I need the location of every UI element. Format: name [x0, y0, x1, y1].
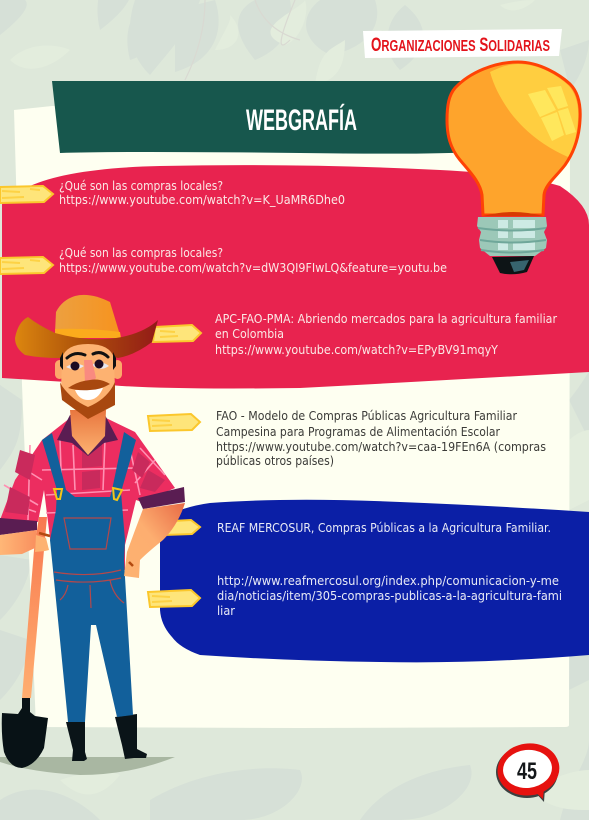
link text 6: liar [217, 604, 235, 618]
beard [60, 382, 115, 419]
cream content panel [14, 105, 570, 728]
link text 1: https://www.youtube.com/watch?v=K_UaMR6Dhe0 [59, 193, 345, 207]
overalls stitching [54, 518, 124, 608]
eyes [66, 362, 109, 369]
page number badge [494, 739, 563, 802]
section label: Organizaciones Solidarias: ORGANIZACIONES SOLIDARIAS [371, 35, 550, 56]
arrow tag 5 [165, 520, 200, 535]
collar [57, 415, 118, 456]
link text 3: https://www.youtube.com/watch?v=EPyBV91mqyY [215, 343, 499, 357]
section label: Organizaciones Solidarias [363, 29, 562, 58]
link text 4: Campesina para Programas de Alimentación Escolar [216, 425, 500, 439]
eyebrows [67, 353, 108, 358]
green title banner [52, 81, 475, 154]
link text 1 [59, 179, 345, 207]
arrow tag 4 [148, 414, 200, 431]
link text 3 [215, 312, 557, 357]
arrow tag 1 [0, 186, 53, 203]
shovel [2, 517, 48, 768]
link text 3: en Colombia [215, 327, 284, 341]
farmer illustration [0, 295, 185, 775]
link text 6: http://www.reafmercosul.org/index.php/comunicacion-y-me [217, 574, 559, 588]
link text 2: https://www.youtube.com/watch?v=dW3QI9FIwLQ&feature=youtu.be [59, 261, 447, 275]
buckles [54, 488, 122, 500]
moustache [68, 380, 110, 390]
link text 6 [217, 574, 562, 618]
head [55, 344, 122, 419]
hat [15, 295, 158, 358]
shirt [0, 415, 185, 570]
link text 4: FAO - Modelo de Compras Públicas Agricultura Familiar [216, 409, 517, 423]
panel: blue links [160, 500, 589, 662]
link text 4: https://www.youtube.com/watch?v=caa-19FEn6A (compras [216, 440, 546, 454]
arrow tag 3 [153, 325, 201, 342]
link text 2 [59, 246, 447, 275]
link text 1: ¿Qué son las compras locales? [59, 179, 223, 193]
icon: light bulb [447, 62, 580, 274]
sleeve cuffs [0, 487, 185, 535]
panel: red links [2, 165, 589, 388]
link text 6: dia/noticias/item/305-compras-publicas-a-la-agricultura-fami [217, 589, 562, 603]
link text 4: públicas otros países) [216, 454, 334, 468]
link text 3: APC-FAO-PMA: Abriendo mercados para la agricultura familiar [215, 312, 557, 326]
link text 5: REAF MERCOSUR, Compras Públicas a la Agricultura Familiar. [217, 521, 551, 535]
page number: 45 [517, 758, 537, 785]
neck [70, 410, 106, 455]
title: Webgrafía: WEBGRAFÍA [246, 103, 357, 137]
overalls [42, 432, 136, 722]
link text 2: ¿Qué son las compras locales? [59, 246, 223, 260]
arrow tag 2 [0, 257, 53, 274]
nose [84, 360, 96, 382]
boots [66, 714, 147, 761]
arms and hands [0, 503, 185, 578]
link text 4 [216, 409, 546, 468]
arrow tag 6 [148, 590, 200, 607]
mouth [75, 388, 103, 400]
ground shadow [0, 757, 175, 775]
